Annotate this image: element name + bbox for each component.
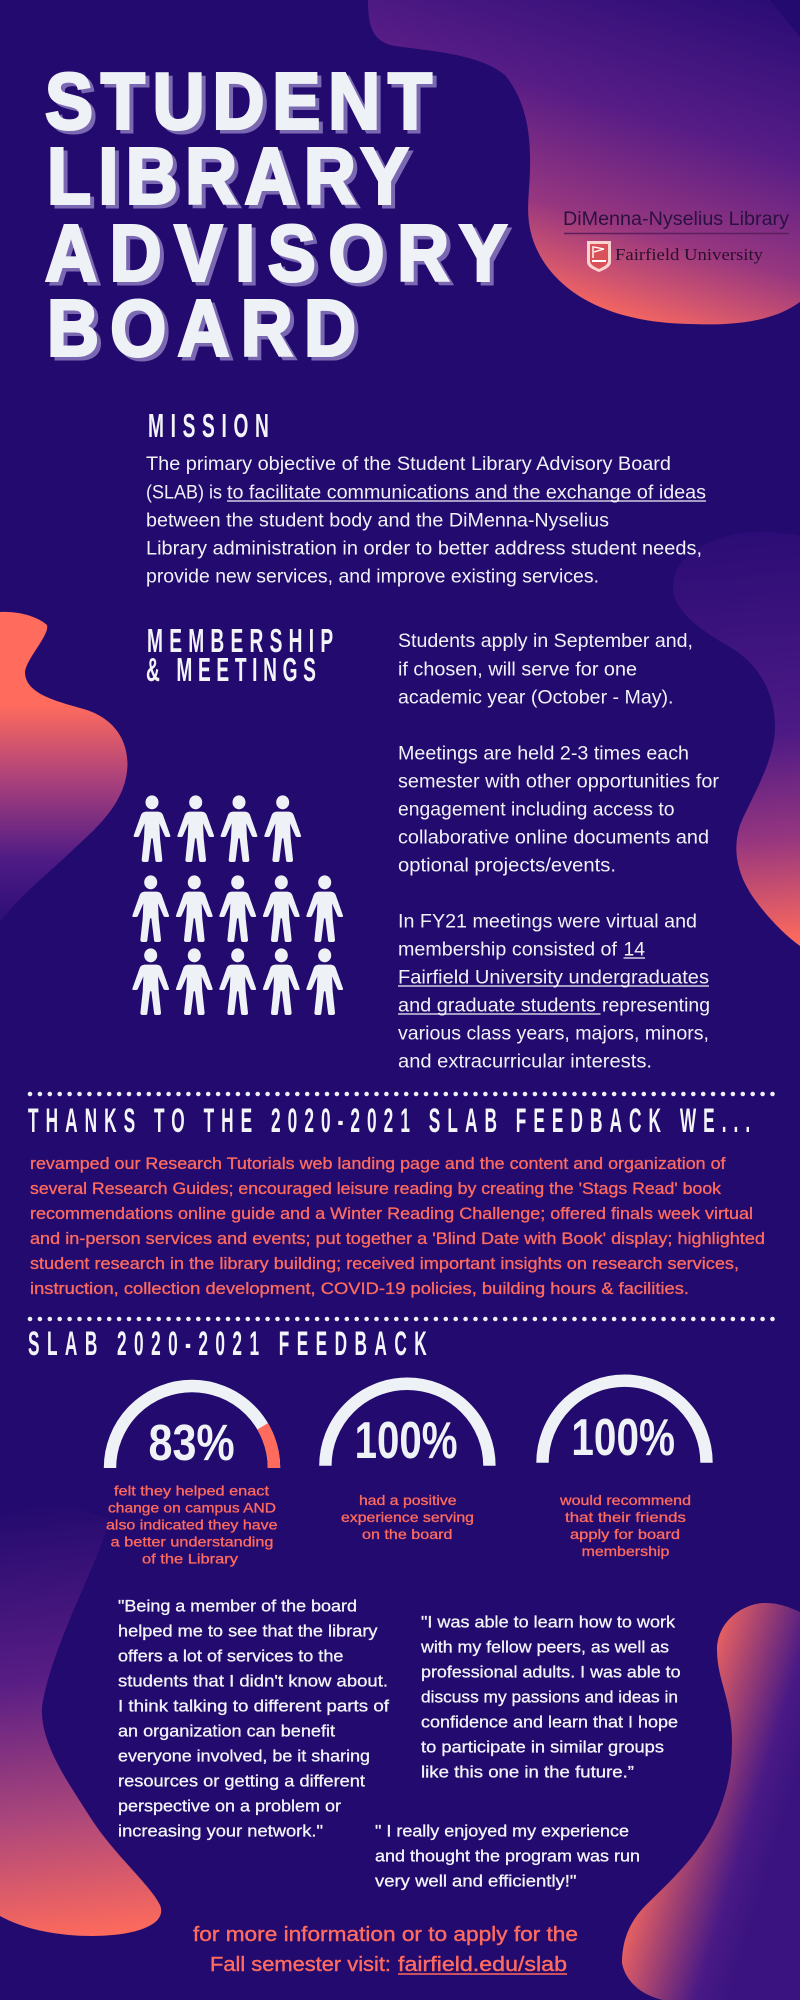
- text: feedback outcomes: recommendations online guide and a Winter Reading Challenge; offered finals week virtual: [30, 1205, 753, 1223]
- icon: group of 14 people: [132, 795, 343, 1015]
- caption: 83 percent: change on campus AND: [108, 1500, 276, 1516]
- heading: thanks to feedback: THANKS TO THE 2020-2021 SLAB FEEDBACK WE...: [28, 1100, 757, 1140]
- gauge: 100 percent positive experience: 100%: [355, 1412, 458, 1470]
- caption: 83 percent: also indicated they have: [106, 1517, 278, 1533]
- quote: really enjoyed: " I really enjoyed my experience: [375, 1822, 629, 1841]
- title shadow: STUDENT: [49, 61, 444, 150]
- text: membership details: and graduate students: [398, 994, 596, 1016]
- text: mission: The primary objective of the Student Library Advisory Board: [146, 453, 671, 475]
- footer call to action: [193, 1923, 578, 1976]
- quote: being a member: students that I didn't know about.: [118, 1672, 388, 1691]
- gauge: 100 percent positive experience: [325, 1384, 489, 1470]
- heading: mission: MISSION: [148, 408, 275, 444]
- blob: top right: [368, 0, 800, 324]
- text: membership details: collaborative online documents and: [398, 826, 709, 848]
- text: feedback outcomes: and in-person services and events; put together a 'Blind Date with Book' display; highlighted: [30, 1230, 765, 1248]
- text: feedback outcomes: student research in the library building; received important insights on research services,: [30, 1255, 739, 1273]
- heading: slab feedback: SLAB 2020-2021 FEEDBACK: [28, 1323, 434, 1363]
- caption: would recommend: that their friends: [565, 1509, 686, 1525]
- caption: positive experience: had a positive: [359, 1492, 457, 1508]
- title shadow: ADVISORY: [49, 213, 524, 302]
- quote: really enjoyed: and thought the program was run: [375, 1847, 640, 1866]
- heading: membership and meetings: & MEETINGS: [146, 652, 322, 688]
- gauge: 83 percent: [110, 1386, 274, 1471]
- gauge: 100 percent would recommend: 100%: [571, 1409, 675, 1467]
- gauge: 100 percent would recommend: [542, 1381, 706, 1467]
- quote: learn how to work: [420, 1613, 681, 1782]
- caption: positive experience: on the board: [362, 1526, 452, 1542]
- text: membership details: [398, 630, 720, 1072]
- blob: left middle: [0, 612, 128, 922]
- text: feedback outcomes: revamped our Research Tutorials web landing page and the content and organization of: [30, 1155, 726, 1173]
- text: membership details: optional projects/events.: [398, 854, 616, 876]
- footer call to action: for more information or to apply for the: [193, 1923, 578, 1946]
- text: mission: between the student body and the DiMenna-Nyselius: [146, 510, 609, 532]
- caption: 83 percent: felt they helped enact: [114, 1483, 269, 1499]
- text: membership details: Students apply in September and,: [398, 630, 693, 652]
- text: membership details: academic year (October - May).: [398, 686, 674, 708]
- gauge: 83 percent: 83%: [148, 1414, 235, 1471]
- quote: being a member: an organization can benefit: [118, 1722, 335, 1741]
- title shadow: BOARD: [51, 288, 371, 377]
- heading: membership and meetings: [146, 623, 339, 688]
- title text: ADVISORY: [45, 209, 520, 298]
- text: mission: to facilitate communications and the exchange of ideas: [227, 481, 706, 503]
- text: mission: provide new services, and improve existing services.: [146, 566, 599, 588]
- caption: 83 percent: [106, 1483, 278, 1567]
- logo: DiMenna-Nyselius Library: [563, 209, 790, 230]
- blob: bottom left: [0, 1480, 161, 1936]
- caption: 83 percent: of the Library: [142, 1551, 238, 1567]
- icon: university shield: [587, 241, 611, 272]
- caption: would recommend: apply for board: [570, 1526, 680, 1542]
- title: [45, 57, 524, 377]
- caption: would recommend: [559, 1492, 691, 1559]
- quote: being a member: I think talking to different parts of: [118, 1697, 389, 1716]
- text: membership details: Fairfield University undergraduates: [398, 966, 709, 988]
- quote: learn how to work: confidence and learn that I hope: [421, 1713, 678, 1732]
- text: membership details: representing: [602, 994, 710, 1016]
- text: membership details: various class years, majors, minors,: [398, 1022, 709, 1044]
- logo: [563, 209, 790, 272]
- title text: STUDENT: [45, 57, 440, 146]
- quote: being a member: increasing your network.": [118, 1822, 323, 1841]
- title text: LIBRARY: [47, 132, 416, 221]
- quote: learn how to work: discuss my passions and ideas in: [421, 1688, 678, 1707]
- text: membership details: and extracurricular interests.: [398, 1050, 652, 1072]
- quote: learn how to work: "I was able to learn how to work: [421, 1613, 676, 1632]
- text: mission: (SLAB) is: [146, 481, 222, 503]
- text: membership details: engagement including access to: [398, 798, 675, 820]
- quote: being a member: [118, 1597, 389, 1841]
- quote: being a member: offers a lot of services to the: [118, 1647, 343, 1666]
- quote: being a member: perspective on a problem or: [118, 1797, 341, 1816]
- quote: learn how to work: to participate in similar groups: [421, 1738, 664, 1757]
- quote: being a member: helped me to see that the library: [118, 1622, 378, 1641]
- blob: right middle: [673, 532, 800, 946]
- caption: would recommend: would recommend: [559, 1492, 691, 1508]
- quote: being a member: "Being a member of the board: [118, 1597, 357, 1616]
- quote: being a member: everyone involved, be it sharing: [118, 1747, 370, 1766]
- text: membership details: Meetings are held 2-3 times each: [398, 742, 689, 764]
- text: feedback outcomes: several Research Guides; encouraged leisure reading by creating the 'Stags Read' book: [30, 1180, 722, 1198]
- caption: 83 percent: a better understanding: [111, 1534, 274, 1550]
- text: membership details: if chosen, will serve for one: [398, 658, 637, 680]
- heading: membership and meetings: MEMBERSHIP: [147, 623, 339, 659]
- quote: really enjoyed: [375, 1822, 640, 1891]
- text: feedback outcomes: [30, 1155, 765, 1298]
- footer call to action: Fall semester visit:: [210, 1953, 391, 1976]
- quote: being a member: resources or getting a different: [118, 1772, 365, 1791]
- blob: bottom right: [622, 1603, 800, 2000]
- text: mission: Library administration in order to better address student needs,: [146, 538, 702, 560]
- title text: [45, 57, 520, 373]
- caption: positive experience: [341, 1492, 474, 1542]
- quote: learn how to work: professional adults. I was able to: [421, 1663, 681, 1682]
- text: membership details: membership consisted of: [398, 938, 618, 960]
- text: membership details: In FY21 meetings were virtual and: [398, 910, 697, 932]
- text: membership details: 14: [624, 938, 645, 960]
- logo: Fairfield University: [615, 245, 764, 264]
- footer call to action: fairfield.edu/slab: [398, 1953, 567, 1976]
- caption: positive experience: experience serving: [341, 1509, 474, 1525]
- text: mission: [146, 453, 706, 588]
- title shadow: [49, 61, 524, 377]
- quote: learn how to work: like this one in the future.”: [421, 1763, 634, 1782]
- title text: BOARD: [47, 284, 367, 373]
- text: membership details: semester with other opportunities for: [398, 770, 720, 792]
- quote: learn how to work: with my fellow peers, as well as: [420, 1638, 669, 1657]
- caption: would recommend: membership: [582, 1543, 670, 1559]
- text: feedback outcomes: instruction, collection development, COVID-19 policies, building hours & facilities.: [30, 1280, 689, 1298]
- title shadow: LIBRARY: [51, 136, 420, 225]
- quote: really enjoyed: very well and efficiently!": [375, 1872, 576, 1891]
